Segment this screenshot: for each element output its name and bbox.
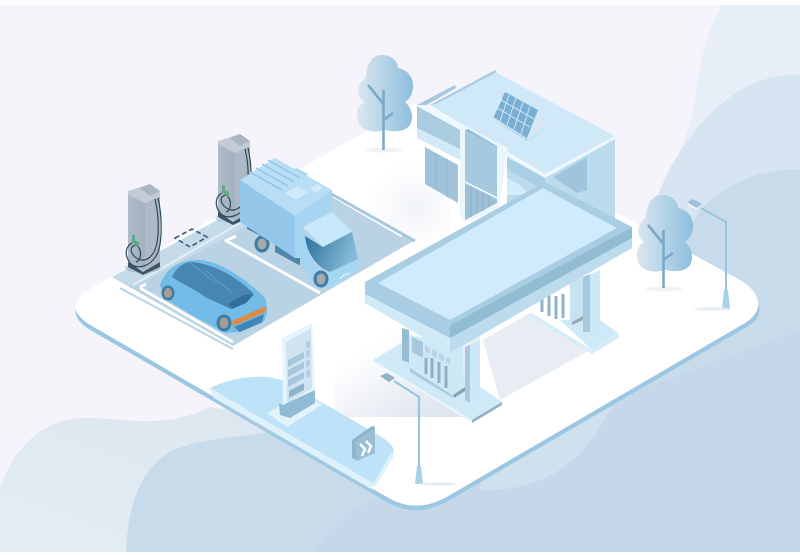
charger: rear	[215, 134, 251, 225]
tree: right	[637, 195, 693, 292]
rear pumps	[542, 275, 583, 325]
cab front	[313, 259, 361, 288]
dashed bay marker	[175, 229, 207, 247]
rear wheel	[254, 236, 270, 252]
charger: left	[125, 184, 161, 275]
platform edge	[76, 103, 759, 510]
curb	[208, 387, 373, 489]
platform surface	[76, 103, 758, 506]
ground shadows	[335, 165, 590, 417]
left wing parapet	[417, 85, 456, 107]
car wheels	[162, 286, 232, 332]
forecourt islands	[530, 312, 620, 354]
tree: back	[357, 55, 413, 152]
charger strip	[112, 208, 258, 287]
solar panel	[491, 92, 547, 141]
car	[160, 260, 267, 333]
right wall	[507, 136, 615, 225]
cargo box end	[295, 190, 332, 258]
cab roof	[303, 212, 352, 247]
windshield	[305, 232, 358, 272]
totem pad	[267, 395, 323, 427]
left windows	[425, 147, 458, 203]
truck undercarriage	[247, 226, 300, 265]
canopy side faces	[365, 282, 450, 353]
canopy rim	[365, 182, 632, 325]
arrow sign	[352, 426, 375, 461]
cargo box top	[240, 158, 332, 216]
plaza	[208, 377, 394, 494]
background blobs: bottom	[0, 300, 800, 552]
tower lower panel	[465, 183, 497, 220]
lamp: right	[687, 199, 730, 311]
rear right pillars	[583, 270, 600, 335]
left wall bands	[417, 106, 462, 150]
truck	[240, 158, 361, 288]
cargo box side	[240, 180, 295, 258]
tower panel	[465, 130, 497, 197]
gas station	[365, 182, 632, 423]
front wheel	[314, 270, 328, 288]
totem sign	[279, 323, 315, 418]
rear left pillar	[402, 328, 409, 363]
front pillar	[465, 340, 480, 403]
roof	[430, 72, 615, 174]
parking area	[112, 175, 415, 349]
pump block	[409, 335, 465, 398]
building	[417, 70, 615, 225]
platform	[76, 103, 759, 510]
background blobs: right	[635, 5, 800, 420]
orange stripe	[232, 306, 266, 326]
recessed window	[553, 157, 587, 193]
cab side	[300, 228, 322, 286]
car glass roof	[172, 262, 253, 309]
totem base	[279, 390, 315, 418]
parking lines	[133, 223, 240, 285]
canopy top	[378, 188, 617, 320]
tower frame	[460, 123, 508, 222]
lamp: front	[380, 373, 456, 486]
